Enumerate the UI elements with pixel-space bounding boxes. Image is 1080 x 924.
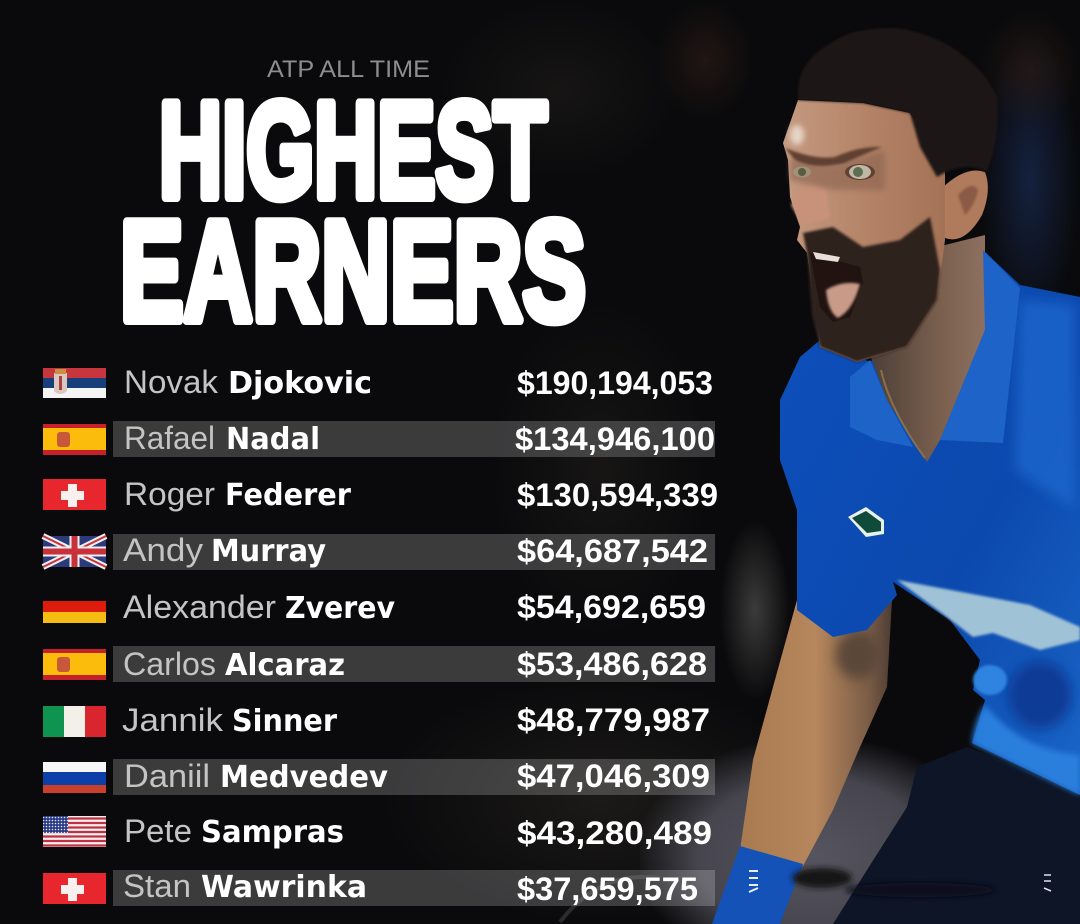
row 8: Daniil Medvedev: Medvedev	[220, 760, 388, 795]
row 5: Alexander Zverev: Alexander	[123, 589, 276, 625]
row 7: Jannik Sinner	[43, 702, 710, 739]
row 6: Carlos Alcaraz	[43, 646, 715, 683]
eyes	[793, 164, 875, 180]
row bar	[113, 759, 715, 795]
eyebrow heading: ATP ALL TIME	[267, 56, 430, 83]
row 1: Novak Djokovic	[43, 364, 713, 401]
row 10: Stan Wawrinka: Wawrinka	[201, 870, 367, 905]
ranking table	[43, 364, 718, 907]
forehead highlight	[790, 125, 804, 145]
shirt collar	[940, 250, 1020, 443]
row 4: Andy Murray: Murray	[211, 534, 326, 569]
row 7: Jannik Sinner: Jannik	[122, 702, 224, 738]
row 2: Rafael Nadal: Nadal	[226, 422, 320, 457]
row bar	[113, 646, 715, 682]
row 9: Pete Sampras: $43,280,489	[517, 815, 712, 851]
row bar	[113, 534, 715, 570]
row 8: Daniil Medvedev: $47,046,309	[517, 758, 710, 794]
flag: United Kingdom	[43, 536, 106, 567]
flag: United States	[43, 816, 106, 847]
chest highlight	[1015, 300, 1075, 510]
sweat patch on shirt	[897, 580, 1080, 650]
row 5: Alexander Zverev	[43, 589, 706, 626]
row 5: Alexander Zverev: $54,692,659	[517, 589, 706, 625]
row 3: Roger Federer	[43, 476, 718, 513]
row 7: Jannik Sinner: Sinner	[232, 704, 337, 739]
row 3: Roger Federer: Federer	[225, 478, 351, 513]
nose	[790, 187, 829, 222]
row 2: Rafael Nadal	[43, 420, 715, 457]
row 2: Rafael Nadal: Rafael	[124, 420, 215, 456]
title line 2: EARNERS	[120, 192, 586, 351]
hair	[798, 28, 998, 177]
row 7: Jannik Sinner: $48,779,987	[517, 702, 710, 738]
row 1: Novak Djokovic: Djokovic	[228, 366, 372, 401]
player shorts	[833, 747, 1080, 924]
shirt hem light	[972, 705, 1080, 795]
face	[783, 100, 945, 362]
necklace	[881, 370, 925, 458]
row 1: Novak Djokovic: $190,194,053	[517, 365, 713, 401]
flag: Germany	[43, 601, 106, 623]
row 6: Carlos Alcaraz: Carlos	[123, 646, 216, 682]
row 3: Roger Federer: Roger	[124, 476, 215, 512]
row 10: Stan Wawrinka: Stan	[123, 868, 191, 904]
row 2: Rafael Nadal: $134,946,100	[515, 421, 715, 457]
row 1: Novak Djokovic: Novak	[124, 364, 219, 400]
row 4: Andy Murray: Andy	[123, 532, 203, 568]
neck	[870, 235, 985, 462]
flag: Serbia	[43, 368, 106, 398]
row 3: Roger Federer: $130,594,339	[517, 477, 718, 513]
flag: Switzerland	[43, 479, 106, 510]
row 8: Daniil Medvedev: Daniil	[124, 758, 210, 794]
row 5: Alexander Zverev: Zverev	[285, 591, 395, 626]
ear	[945, 170, 988, 240]
mouth	[810, 252, 863, 322]
flag: Russia	[43, 762, 106, 793]
crocodile logo	[848, 507, 884, 537]
row 10: Stan Wawrinka: $37,659,575	[517, 871, 698, 907]
player arm	[740, 600, 892, 866]
row 10: Stan Wawrinka	[43, 868, 715, 907]
blue shirt	[780, 250, 1080, 795]
title	[120, 74, 586, 351]
row 9: Pete Sampras: Sampras	[201, 815, 344, 850]
row 4: Andy Murray	[43, 532, 715, 570]
row 6: Carlos Alcaraz: $53,486,628	[517, 646, 707, 682]
row 9: Pete Sampras: Pete	[124, 813, 192, 849]
wristband logo remnants and watermark smudge	[792, 868, 1051, 897]
flag: Switzerland	[43, 873, 106, 904]
beard	[803, 217, 940, 362]
wristband	[712, 846, 803, 924]
flag: Italy	[43, 706, 106, 737]
flag: Spain	[43, 649, 106, 680]
flag: Spain	[43, 424, 106, 455]
eye socket shadow	[790, 150, 885, 190]
row 8: Daniil Medvedev	[43, 758, 715, 795]
row bar	[113, 421, 715, 457]
row 6: Carlos Alcaraz: Alcaraz	[225, 648, 345, 683]
row 4: Andy Murray: $64,687,542	[517, 533, 708, 569]
title line 1: HIGHEST	[159, 74, 547, 226]
brow	[785, 147, 882, 166]
photo: tennis player shouting	[712, 28, 1080, 924]
row 9: Pete Sampras	[43, 813, 712, 851]
background: dark blurred arena	[478, 22, 1072, 924]
row bar	[113, 870, 715, 906]
abdomen shadow	[1008, 661, 1072, 729]
